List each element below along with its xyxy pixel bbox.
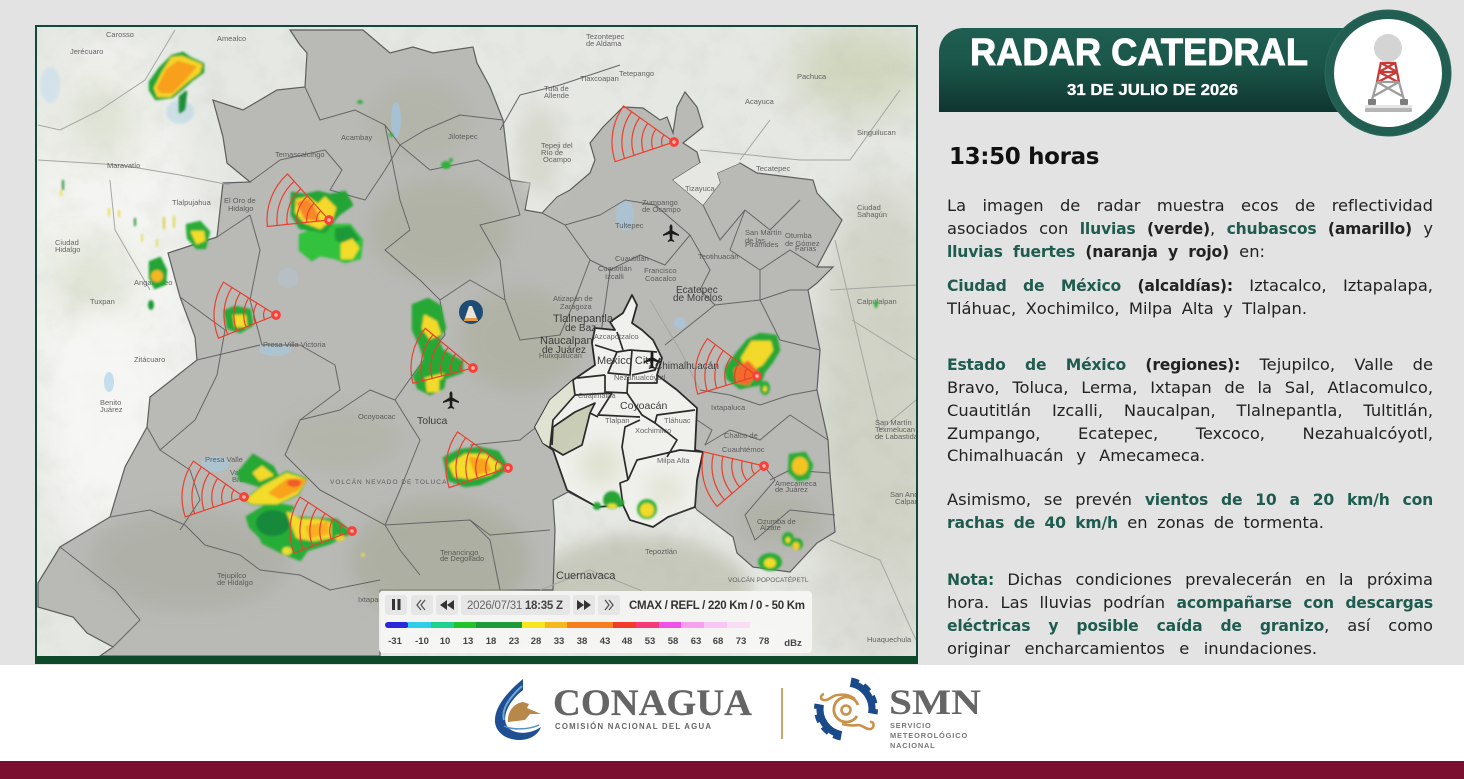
place labels: Presa Valle	[205, 455, 243, 464]
text block: note: eléctricas y posible caída de granizo, así como	[947, 616, 1433, 635]
product label: CMAX / REFL / 220 Km / 0 - 50 Km	[629, 600, 805, 612]
scale labels: 48	[622, 636, 632, 647]
text block: reflectivity summary: asociados con lluvias (verde), chubascos (amarillo) y	[947, 219, 1433, 238]
scale labels: dBz	[784, 638, 802, 649]
place labels: Ixtapan	[358, 595, 383, 604]
place labels: Singuilucan	[857, 128, 896, 137]
large place labels: Chimalhuacán	[655, 361, 719, 372]
place labels: Tlalpan	[605, 416, 630, 425]
place labels: VOLCÁN NEVADO DE TOLUCA	[330, 477, 447, 486]
place labels: Juárez	[100, 405, 123, 414]
logo subtitle: SMN: METEOROLÓGICO	[890, 731, 968, 740]
place labels: Alzate	[760, 523, 781, 532]
place labels: Teotihuacán	[698, 252, 738, 261]
scale labels: 33	[554, 636, 564, 647]
place labels: Izcalli	[605, 272, 624, 281]
text block: winds	[947, 490, 1433, 532]
icon: volcano marker	[459, 300, 483, 324]
place labels: Ciudad	[857, 203, 881, 212]
place labels: Tepoztlán	[645, 547, 677, 556]
place labels: Nezahualcóyotl	[614, 373, 666, 382]
text block: Ciudad de México	[946, 276, 1433, 318]
place labels: Allende	[544, 91, 569, 100]
large place labels: de Baz	[565, 323, 596, 334]
place labels: Farías	[795, 244, 817, 253]
place labels: Otumba	[785, 231, 813, 240]
place labels: de Gómez	[785, 239, 820, 248]
place labels: Amecameca	[775, 479, 818, 488]
place labels: Tezontepec	[586, 32, 625, 41]
scale labels: 78	[759, 636, 769, 647]
map bottom bar	[35, 656, 918, 664]
place labels: de Hidalgo	[217, 578, 253, 587]
cell: southwest complex	[238, 455, 350, 560]
large place labels: Tlalnepantla	[553, 313, 614, 325]
place labels: Tetepango	[619, 69, 654, 78]
text block: Estado de México: Chimalhuacán y Amecameca.	[947, 446, 1205, 465]
logo divider	[781, 688, 783, 739]
place labels: Angangueo	[134, 278, 172, 287]
scale labels: 68	[713, 636, 723, 647]
place labels: Zitácuaro	[134, 355, 165, 364]
place labels: de Ocampo	[642, 205, 681, 214]
place labels: VOLCÁN POPOCATÉPETL	[728, 575, 809, 584]
place labels: Tepeji del	[541, 141, 573, 150]
playback buttons	[385, 595, 620, 615]
text block: note: Nota: Dichas condiciones prevalecerán en la próxima	[947, 570, 1433, 589]
timestamp: 2026/07/31 18:35 Z	[467, 600, 563, 612]
place labels: de Degollado	[440, 554, 484, 563]
text block: Estado de México	[947, 355, 1433, 465]
text block: note: originar encharcamientos e inundaciones.	[947, 639, 1317, 658]
text block: reflectivity summary: La imagen de radar muestra ecos de reflectividad	[947, 196, 1433, 215]
place labels: Ocoyoacac	[358, 412, 396, 421]
title: RADAR CATEDRAL	[970, 32, 1308, 74]
place labels: Pachuca	[797, 72, 827, 81]
text block: note	[947, 570, 1433, 658]
scale labels: 10	[440, 636, 450, 647]
text block: Estado de México: Bravo, Toluca, Lerma, Ixtapan de la Sal, Atlacomulco,	[947, 378, 1433, 397]
large place labels: Cuernavaca	[556, 570, 616, 582]
place labels: Azcapotzalco	[594, 332, 639, 341]
place labels: Maravatío	[107, 161, 140, 170]
light roads and outer boundaries	[38, 30, 916, 640]
logo subtitle: COMISIÓN NACIONAL DEL AGUA	[555, 722, 711, 731]
place labels: Calpulalpan	[857, 297, 897, 306]
place labels: Tlaxcoapan	[580, 74, 619, 83]
cell: east	[726, 334, 779, 395]
logo subtitle: SMN	[890, 721, 968, 750]
scale labels	[388, 636, 802, 649]
cell: south Mexico City	[593, 491, 657, 519]
place labels: Cuautitlán	[615, 254, 649, 263]
cell: small echoes northwest	[60, 100, 878, 557]
Mexico City boundary	[535, 295, 703, 527]
place labels: Temascalcingo	[275, 150, 325, 159]
place labels: Jerécuaro	[70, 47, 103, 56]
text block: note: hora. Las lluvias podrían acompañarse con descargas	[947, 593, 1433, 612]
cell: southeast small echoes	[758, 453, 812, 571]
municipal boundaries	[60, 65, 835, 647]
large place labels: Coyoacán	[620, 400, 667, 412]
place labels: Pirámides	[745, 240, 779, 249]
place labels: Xochimilco	[635, 426, 671, 435]
place labels: Ocampo	[543, 155, 571, 164]
place labels: Huaquechula	[867, 635, 912, 644]
place labels: Tuxpan	[90, 297, 115, 306]
scale labels: 23	[509, 636, 519, 647]
large place labels: Naucalpan	[540, 335, 593, 347]
scale labels: -10	[415, 636, 429, 647]
terrain shading on region	[90, 80, 820, 620]
scale labels: 43	[600, 636, 610, 647]
scale labels: 53	[645, 636, 655, 647]
place labels: Cuajimalpa	[578, 391, 616, 400]
scale labels: 58	[668, 636, 678, 647]
place labels: Ixtapaluca	[711, 403, 746, 412]
dBZ colour scale	[385, 622, 750, 628]
place labels: Huixquilucan	[539, 351, 582, 360]
scale labels: 18	[486, 636, 496, 647]
text block: Ciudad de México: Ciudad de México (alcaldías): Iztacalco, Iztapalapa,	[947, 276, 1433, 295]
text block: reflectivity summary: lluvias fuertes (naranja y rojo) en:	[947, 242, 1265, 261]
cell: northwest	[150, 53, 203, 112]
large place labels: de Juárez	[542, 345, 586, 356]
place labels: Atizapán de	[553, 294, 593, 303]
place labels: Chalco de	[724, 431, 758, 440]
logo subtitle: SMN: NACIONAL	[890, 741, 935, 750]
text block: Estado de México: Estado de México (regiones): Tejupilco, Valle de	[947, 355, 1433, 374]
airport icons	[443, 224, 679, 409]
place labels: Jilotepec	[448, 132, 478, 141]
logo text: SMN: SMN	[889, 682, 981, 722]
place labels: Acambay	[341, 133, 373, 142]
place labels: Tula de	[544, 84, 569, 93]
place labels: Francisco	[644, 266, 677, 275]
place labels: Presa Villa Victoria	[263, 340, 326, 349]
place labels: de Aldama	[586, 39, 622, 48]
gray state region	[38, 30, 842, 656]
scale labels: 73	[736, 636, 746, 647]
place labels: Zumpango	[642, 198, 678, 207]
icon: radar tower	[1324, 10, 1452, 136]
large place labels: Toluca	[417, 415, 448, 427]
maroon footer bar	[0, 761, 1464, 779]
place labels: Milpa Alta	[657, 456, 690, 465]
scale labels: 38	[577, 636, 587, 647]
text block: reflectivity summary	[947, 196, 1433, 261]
place labels: San Martín	[745, 228, 782, 237]
scale labels: 28	[531, 636, 541, 647]
place labels: Tultepec	[615, 221, 644, 230]
place labels: Benito	[100, 398, 121, 407]
radar player control panel	[379, 591, 812, 653]
place labels: Hidalgo	[228, 204, 253, 213]
logo text: CONAGUA: CONAGUA	[553, 683, 752, 724]
header banner	[939, 28, 1349, 112]
cell: Toluca south	[444, 448, 508, 486]
cell: west	[225, 307, 252, 332]
base terrain	[25, 25, 950, 660]
place labels: El Oro de	[224, 196, 256, 205]
place labels: Texmelucan	[875, 425, 915, 434]
place labels: Cuauhtémoc	[722, 445, 765, 454]
time heading: 13:50 horas	[949, 144, 1099, 170]
storm cells: reflectivity echoes	[60, 53, 878, 571]
cell: north central	[292, 192, 362, 262]
place labels: Tizayuca	[685, 184, 716, 193]
text block: Estado de México: Cuautitlán Izcalli, Naucalpan, Tlalnepantla, Tultitlán,	[947, 401, 1433, 420]
place labels: Tecatepec	[756, 164, 790, 173]
place labels: Acayuca	[745, 97, 775, 106]
place labels: Coacalco	[645, 274, 676, 283]
place labels: Bravo	[232, 475, 252, 484]
place labels: Tejupilco	[217, 571, 246, 580]
large place labels: de Morelos	[673, 293, 722, 304]
radar map panel	[35, 25, 918, 664]
scale labels: 63	[691, 636, 701, 647]
cell: Valle de Bravo north	[413, 299, 462, 394]
place labels: San Martín	[875, 418, 912, 427]
title	[970, 32, 1308, 99]
title: 31 DE JULIO DE 2026	[1067, 82, 1238, 99]
text block: Ciudad de México: Tláhuac, Xochimilco, Milpa Alta y Tlalpan.	[947, 299, 1307, 318]
place labels: Zaragoza	[560, 302, 593, 311]
place labels: Tlalpujahua	[172, 198, 212, 207]
logo: CONAGUA emblem	[495, 679, 541, 740]
place labels: Tláhuac	[664, 416, 691, 425]
place labels: de las	[745, 236, 765, 245]
large place labels: Ecatepec	[676, 285, 718, 296]
large place labels	[417, 285, 722, 582]
footer band with logos	[0, 665, 1464, 761]
place labels: Cuautitlán	[598, 264, 632, 273]
place labels: Carosso	[106, 30, 134, 39]
place labels: de Juárez	[775, 485, 808, 494]
scale labels: 13	[463, 636, 473, 647]
text block: winds: rachas de 40 km/h en zonas de tormenta.	[947, 513, 1324, 532]
place labels: Río de	[541, 148, 563, 157]
scale labels: -31	[388, 636, 403, 647]
place labels: Amealco	[217, 34, 246, 43]
place labels: Ciudad	[55, 238, 79, 247]
logo subtitle: SMN: SERVICIO	[890, 721, 932, 730]
text block: Estado de México: Zumpango, Ecatepec, Texcoco, Nezahualcóyotl,	[947, 424, 1433, 443]
place labels	[55, 30, 929, 644]
large place labels: Mexico City	[597, 355, 654, 367]
place labels: Valle de	[230, 468, 257, 477]
logo: SMN gear and swirl	[816, 680, 876, 738]
place labels: Hidalgo	[55, 245, 80, 254]
place labels: Ozumba de	[757, 517, 796, 526]
text block: winds: Asimismo, se prevén vientos de 10 a 20 km/h con	[947, 490, 1433, 509]
radar sectors	[179, 105, 775, 559]
place labels: Tenancingo	[440, 548, 478, 557]
place labels: Sahagún	[857, 210, 887, 219]
